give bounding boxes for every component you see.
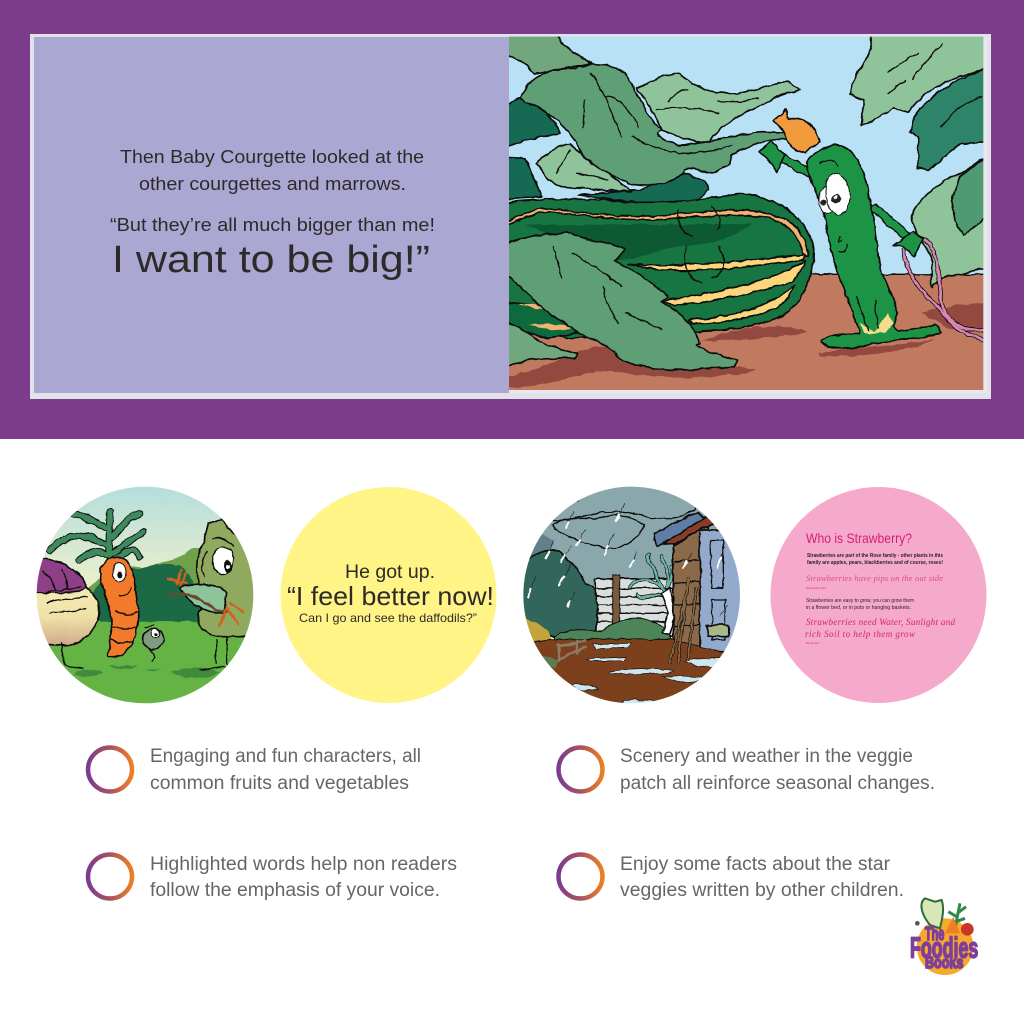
ground shadows [495, 302, 1005, 388]
bottom left light leaf [509, 322, 578, 366]
sky and clouds [542, 486, 718, 588]
turnip character [36, 558, 101, 669]
ground [509, 274, 984, 390]
under marrow dark leaf [578, 173, 709, 205]
ring icon [558, 748, 602, 792]
marrow [495, 194, 813, 338]
disc text [287, 562, 494, 625]
small left leaf [537, 143, 632, 192]
crate [557, 640, 587, 662]
panel: strawberry facts circle [770, 487, 986, 703]
shed roof [653, 512, 705, 547]
bullet text: Highlighted words help non readers [150, 854, 457, 875]
grass [49, 620, 245, 704]
rain [528, 503, 728, 617]
long light leaf [637, 73, 800, 145]
logo sun [917, 918, 973, 975]
panel: rainy veggie patch circle [523, 486, 740, 704]
story text: I want to be big!” [112, 239, 430, 281]
vines [902, 236, 984, 342]
panel: highlighted words circle [280, 487, 496, 703]
story text: other courgettes and marrows. [139, 174, 406, 194]
back dark leaf [509, 96, 561, 200]
bullet text: patch all reinforce seasonal changes. [620, 773, 935, 794]
handwritten notes: Delaney Primary School [806, 586, 826, 590]
big central leaf [520, 64, 792, 185]
post [612, 575, 620, 633]
facts text: Strawberries are easy to grow, you can grow them [806, 598, 914, 604]
spiky plant [630, 555, 673, 597]
lower leaf [495, 233, 737, 370]
facts text: in a flower bed, or in pots or hanging baskets. [806, 605, 911, 611]
fence [595, 578, 678, 637]
carrot character [100, 557, 139, 657]
handwritten notes: Strawberries have pips on the out side [806, 573, 943, 583]
lower left marrow piece [509, 302, 577, 340]
small green bug [143, 625, 164, 662]
panel: character circle [36, 486, 254, 704]
story text [110, 147, 435, 281]
bullet text [150, 854, 457, 901]
baby courgette [759, 141, 942, 348]
handwritten notes: Ben, Year Seven [806, 641, 819, 646]
ring icon [558, 854, 602, 898]
sky [43, 486, 230, 588]
bullet text: Engaging and fun characters, all [150, 746, 421, 767]
distant bushes [88, 547, 200, 592]
tree [523, 548, 600, 638]
story text: Then Baby Courgette looked at the [120, 147, 424, 167]
shed [673, 523, 708, 660]
facts text [806, 553, 943, 611]
bushes [555, 619, 672, 643]
bullet: engaging characters [88, 746, 421, 794]
right leaves [849, 36, 984, 289]
yellow disc [280, 487, 496, 703]
illustration: courgette and marrow [509, 36, 984, 390]
disc text: He got up. [345, 562, 435, 583]
logo wordmark: Foodies [910, 932, 978, 964]
heading: Who is Strawberry? [806, 530, 912, 546]
logo wordmark: The [925, 923, 944, 944]
courgette eyes [818, 186, 833, 214]
bullet text: Enjoy some facts about the star [620, 854, 891, 875]
handwritten notes: rich Soil to help them grow [805, 629, 915, 639]
logo wordmark [910, 923, 978, 972]
purple header band [0, 0, 1024, 439]
ring icon [88, 854, 132, 898]
logo: The Foodies Books [910, 898, 978, 975]
bullet: highlighted words [88, 854, 457, 901]
bullet text [150, 746, 421, 794]
pear character [168, 519, 263, 670]
facts text: family are apples, pears, blackberries and of course, roses! [807, 560, 943, 566]
panel: story text page [34, 37, 509, 393]
bullet text: follow the emphasis of your voice. [150, 880, 440, 901]
facts text: Strawberries are part of the Rose family - other plants in this [807, 553, 943, 559]
logo wordmark: Books [925, 953, 963, 972]
ring icon [88, 748, 132, 792]
sky [509, 36, 984, 275]
logo veggies [915, 898, 974, 936]
mud [508, 639, 728, 727]
bullet: veggie facts [558, 854, 904, 901]
panel: book spread [30, 20, 1005, 410]
disc text: “I feel better now! [287, 581, 494, 611]
disc text: Can I go and see the daffodils?” [299, 611, 477, 625]
right frame strip [509, 37, 987, 393]
handwritten notes: Strawberries need Water, Sunlight and [806, 617, 956, 627]
top left leaf [509, 36, 592, 75]
marrow stripes [495, 208, 808, 257]
page background [34, 37, 509, 393]
bullet text [620, 746, 935, 794]
spread frame [30, 34, 991, 399]
bullet text [620, 854, 904, 901]
bullet text: Scenery and weather in the veggie [620, 746, 913, 767]
pink disc [770, 487, 986, 703]
puddles [572, 643, 745, 707]
gift bundle [180, 585, 227, 613]
bullet: scenery and weather [558, 746, 935, 794]
flower [774, 110, 820, 153]
bullet text: common fruits and vegetables [150, 773, 409, 794]
story text: “But they’re all much bigger than me! [110, 215, 435, 235]
carrot leaves [50, 512, 143, 560]
bullet text: veggies written by other children. [620, 880, 904, 901]
handwritten notes [805, 573, 956, 646]
planks [670, 577, 697, 663]
